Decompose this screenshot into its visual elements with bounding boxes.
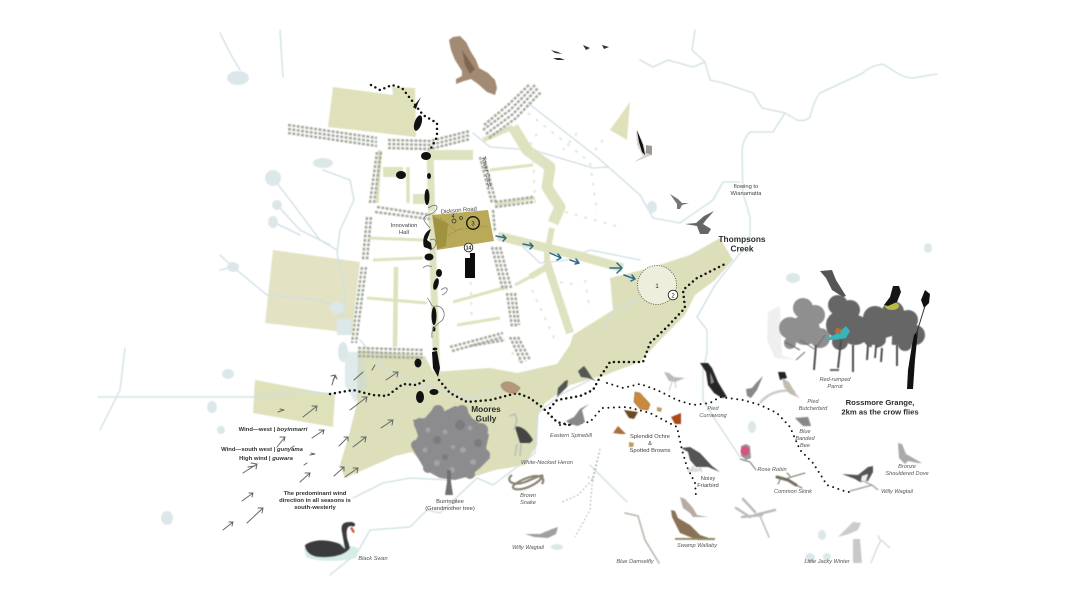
street network xyxy=(367,102,630,380)
label: flowing to Wianamatta: Wianamatta xyxy=(731,191,762,197)
label: flowing to Wianamatta: flowing to xyxy=(734,184,758,190)
Burringilee grandmother tree xyxy=(411,405,490,495)
label: Rose Robin: Rose Robin xyxy=(757,467,787,473)
butterfly: brown xyxy=(624,410,638,419)
wind note: south-westerly xyxy=(294,505,337,511)
black trunk and bird xyxy=(907,290,930,389)
yellow patch xyxy=(885,302,899,310)
label: Blue Banded Bee: Blue xyxy=(799,429,811,435)
wind label: high wind: High wind | guwara xyxy=(239,456,294,462)
dotted biodiversity trails xyxy=(330,85,850,497)
bird: whistling kite xyxy=(449,36,497,95)
insect: blue damselfly wings xyxy=(736,499,775,537)
brown snake xyxy=(509,475,543,489)
waterways and creeks xyxy=(98,30,937,575)
place label: Moores Gully: Moores xyxy=(471,404,501,414)
winding grey creek line xyxy=(423,205,447,338)
place label: Moores Gully: Gully xyxy=(476,414,497,424)
label: Burringilee: Burringilee xyxy=(436,499,464,505)
Innovation precinct plaza: 3 xyxy=(471,222,475,228)
label: Noisy Friarbird: Friarbird xyxy=(697,483,719,489)
wind note: The predominant wind xyxy=(284,491,346,497)
butterfly: orange xyxy=(634,392,650,410)
black building xyxy=(465,253,475,278)
marker 3 xyxy=(467,217,479,229)
place label: Rossmore Grange: Rossmore Grange, xyxy=(846,398,914,407)
bird: rose robin xyxy=(740,444,756,470)
bird: grey currawong on grove xyxy=(820,270,846,297)
bird: bronze shouldered dove xyxy=(898,443,922,464)
label: White-Necked Heron: White-Necked Heron xyxy=(521,460,573,466)
wind label: south west: Wind—south west | gunyama xyxy=(221,447,304,453)
marker 14 xyxy=(464,243,473,252)
label: Red-rumped Parrot: Parrot xyxy=(827,384,843,390)
label: Innovation Hall: Innovation xyxy=(391,223,417,229)
bird: pied butcherbird xyxy=(760,372,800,403)
label: Willy Wagtail left: Willy Wagtail xyxy=(512,545,545,551)
bird: pied currawong xyxy=(700,363,727,398)
label: Pied Butcherbird: Butcherbird xyxy=(799,406,828,412)
butterfly: red orange xyxy=(671,413,681,424)
bird: red-rumped parrot xyxy=(823,326,850,340)
label: Bronze Shouldered Dove: Shouldered Dove xyxy=(885,471,929,477)
label: Brown Snake: Snake xyxy=(520,500,536,506)
place label: Thompsons Creek: Creek xyxy=(730,244,754,254)
label: Red-rumped Parrot: Red-rumped xyxy=(819,377,851,383)
bird: flock of small birds xyxy=(551,45,609,60)
reptile: common skink xyxy=(777,473,805,488)
black swan xyxy=(304,522,358,561)
insect: damselfly stem xyxy=(625,513,659,563)
label: street: Tower Crest xyxy=(480,156,492,188)
bee: blue banded xyxy=(795,417,811,426)
label: Black Swan: Black Swan xyxy=(358,556,388,562)
label: Noisy Friarbird: Noisy xyxy=(701,476,715,482)
wind note: direction in all seasons is xyxy=(279,498,352,504)
butterfly: brown tent xyxy=(613,426,626,434)
green land parcels and creek corridor xyxy=(253,87,733,478)
label: Common Skink: Common Skink xyxy=(774,489,813,495)
animal tracks xyxy=(560,449,600,537)
animal: swamp wallaby joey xyxy=(680,497,708,517)
reptile: skink on creek xyxy=(501,382,520,393)
label: Little Jacky Winter: Little Jacky Winter xyxy=(804,559,851,565)
bird: hawk in flight xyxy=(634,130,652,162)
ponds xyxy=(161,71,932,563)
bird: grey pigeon in flight xyxy=(685,211,714,234)
labels xyxy=(221,156,929,565)
constructed wetland circle: 2 xyxy=(671,294,675,300)
constructed wetland circle: 1 xyxy=(655,284,659,290)
place label: Rossmore Grange: 2km as the crow flies xyxy=(841,407,919,416)
black vegetation patches on spine xyxy=(396,97,442,403)
label: Pied Currawong: Currawong xyxy=(699,413,728,419)
bird: jacky winter xyxy=(838,522,862,563)
bird: small wren xyxy=(746,376,763,398)
bird: plover xyxy=(664,372,685,391)
constructed wetland circle xyxy=(638,266,678,304)
plant sprig xyxy=(871,535,890,563)
bird: willy wagtail grey xyxy=(525,527,558,538)
bird: black crow on grove xyxy=(884,286,901,306)
label: Blue Banded Bee: Banded xyxy=(795,436,816,442)
bird: noisy friarbird xyxy=(681,447,720,472)
label: Willy Wagtail right: Willy Wagtail xyxy=(881,489,914,495)
label: Splendid Ochre and Spotted Browns: Splendid Ochre xyxy=(630,434,670,440)
label: Eastern Spinebill: Eastern Spinebill xyxy=(550,433,593,439)
tree rows along streets xyxy=(288,84,541,363)
Innovation precinct plaza: 4 xyxy=(452,214,455,220)
label: Swamp Wallaby: Swamp Wallaby xyxy=(677,543,718,549)
bird: small grey bird 2 xyxy=(578,366,596,381)
label: Splendid Ochre and Spotted Browns: Spotted Browns xyxy=(630,448,671,454)
bird: willy wagtail xyxy=(842,466,878,491)
Rossmore Grange tree grove xyxy=(767,295,925,372)
label: Blue Damselfly: Blue Damselfly xyxy=(616,559,655,565)
place label: Thompsons Creek: Thompsons xyxy=(718,234,766,244)
label: Pied Butcherbird: Pied xyxy=(807,399,819,405)
blue flow arrows xyxy=(496,235,635,281)
label: Blue Banded Bee: Bee xyxy=(800,443,810,449)
butterfly: small xyxy=(657,407,662,412)
Innovation precinct plaza xyxy=(432,210,494,250)
label: Pied Currawong: Pied xyxy=(707,406,719,412)
label: Splendid Ochre and Spotted Browns: & xyxy=(648,441,652,447)
bird: white-necked heron xyxy=(510,414,533,456)
label: Burringilee: (Grandmother tree) xyxy=(425,506,475,512)
label: Bronze Shouldered Dove: Bronze xyxy=(898,464,916,470)
bird: eastern spinebill xyxy=(566,404,589,426)
wildlife along trail xyxy=(304,363,922,563)
label: road: Dickson Road xyxy=(441,206,477,216)
wind label: west: Wind—west | boyinmarri xyxy=(239,427,308,433)
bird: small grey bird xyxy=(557,380,568,397)
animal: swamp wallaby xyxy=(671,510,715,540)
marker 14: 14 xyxy=(466,246,471,252)
label: Innovation Hall: Hall xyxy=(399,230,409,236)
bird: grey dove in flight xyxy=(670,194,689,209)
label: Brown Snake: Brown xyxy=(520,493,536,499)
butterfly: tiny spotted xyxy=(629,442,634,447)
wind arrows xyxy=(223,365,398,530)
